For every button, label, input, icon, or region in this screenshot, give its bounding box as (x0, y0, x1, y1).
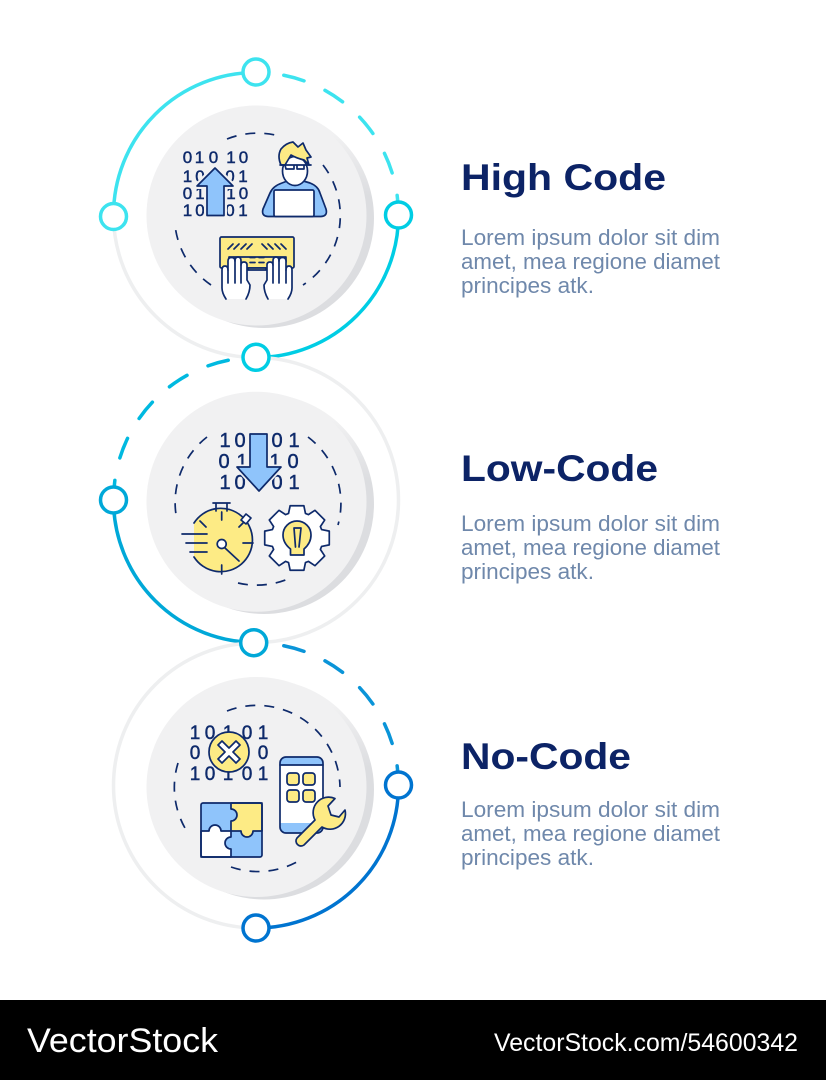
footer image id: VectorStock.com/54600342 (494, 1029, 798, 1057)
footer logo text: VectorStock (27, 1022, 219, 1060)
text block: Low-Code description: principes atk. (461, 559, 594, 584)
disc: low code (146, 392, 374, 614)
text block: Low-Code description: amet, mea regione diamet (461, 535, 720, 560)
icon: binary code with down arrow: 1001 (220, 472, 300, 494)
inner dashed ring: no code (174, 705, 340, 872)
text block: No-Code description: principes atk. (461, 845, 594, 870)
icon: binary code with cross mark: 00 (190, 743, 268, 764)
text block: High Code description: principes atk. (461, 273, 594, 298)
inner dashed ring: high code (175, 133, 340, 285)
icon: binary code with up arrow: 0110 (183, 184, 248, 203)
footer bar (0, 1000, 826, 1080)
icon: binary code with down arrow (218, 430, 300, 494)
icon: binary code with cross mark: 10101 (190, 764, 268, 785)
text block: No-Code description (461, 797, 720, 870)
ring: high code solid arcs (114, 72, 398, 358)
icon: binary code with cross mark (190, 723, 268, 785)
node markers: no code (241, 630, 412, 941)
icon: developer with laptop (263, 142, 326, 216)
icon: puzzle pieces (201, 803, 262, 857)
icon: binary code with up arrow (183, 148, 248, 220)
panel: low code circle (100, 358, 398, 642)
text block: High Code description (461, 225, 720, 298)
text block: Low-Code description: Lorem ipsum dolor sit dim (461, 511, 720, 536)
text block: High Code description: Lorem ipsum dolor sit dim (461, 225, 720, 250)
icon: binary code with down arrow: 1001 (220, 430, 300, 452)
panel: no code circle (114, 630, 412, 941)
icon: keyboard with hands (220, 237, 294, 299)
text block: No-Code description: amet, mea regione diamet (461, 821, 720, 846)
ring: no code solid arc (256, 786, 398, 928)
panel: high code circle (100, 59, 412, 358)
bottom node: high code to low code (243, 344, 269, 370)
ring: high code dashed arc (256, 72, 399, 215)
icon: binary code with up arrow: 01010 (183, 148, 248, 167)
icon: binary code with down arrow: 0110 (218, 451, 299, 473)
ring: low code solid arc (114, 500, 256, 642)
ring: no code dashed arc (256, 643, 399, 786)
ring: low code dashed arc (114, 358, 256, 500)
disc: high code (146, 106, 374, 328)
heading: Low-Code: Low-Code (461, 448, 658, 489)
icon: stopwatch (182, 503, 253, 574)
text block: No-Code description: Lorem ipsum dolor sit dim (461, 797, 720, 822)
icon: gear with light bulb (265, 506, 329, 570)
node markers: high code (100, 59, 412, 230)
text block: Low-Code description (461, 511, 720, 584)
heading: High Code: High Code (461, 157, 666, 198)
text block: High Code description: amet, mea regione diamet (461, 249, 720, 274)
inner dashed ring: low code (175, 437, 341, 585)
node markers: low code (100, 487, 126, 513)
icon: binary code with up arrow: 1001 (183, 167, 248, 186)
icon: binary code with up arrow: 1001 (183, 201, 248, 220)
icon: smartphone with wrench (280, 757, 345, 846)
icon: binary code with cross mark: 10101 (190, 723, 268, 744)
heading: No-Code: No-Code (461, 736, 631, 777)
disc: no code (146, 677, 374, 900)
